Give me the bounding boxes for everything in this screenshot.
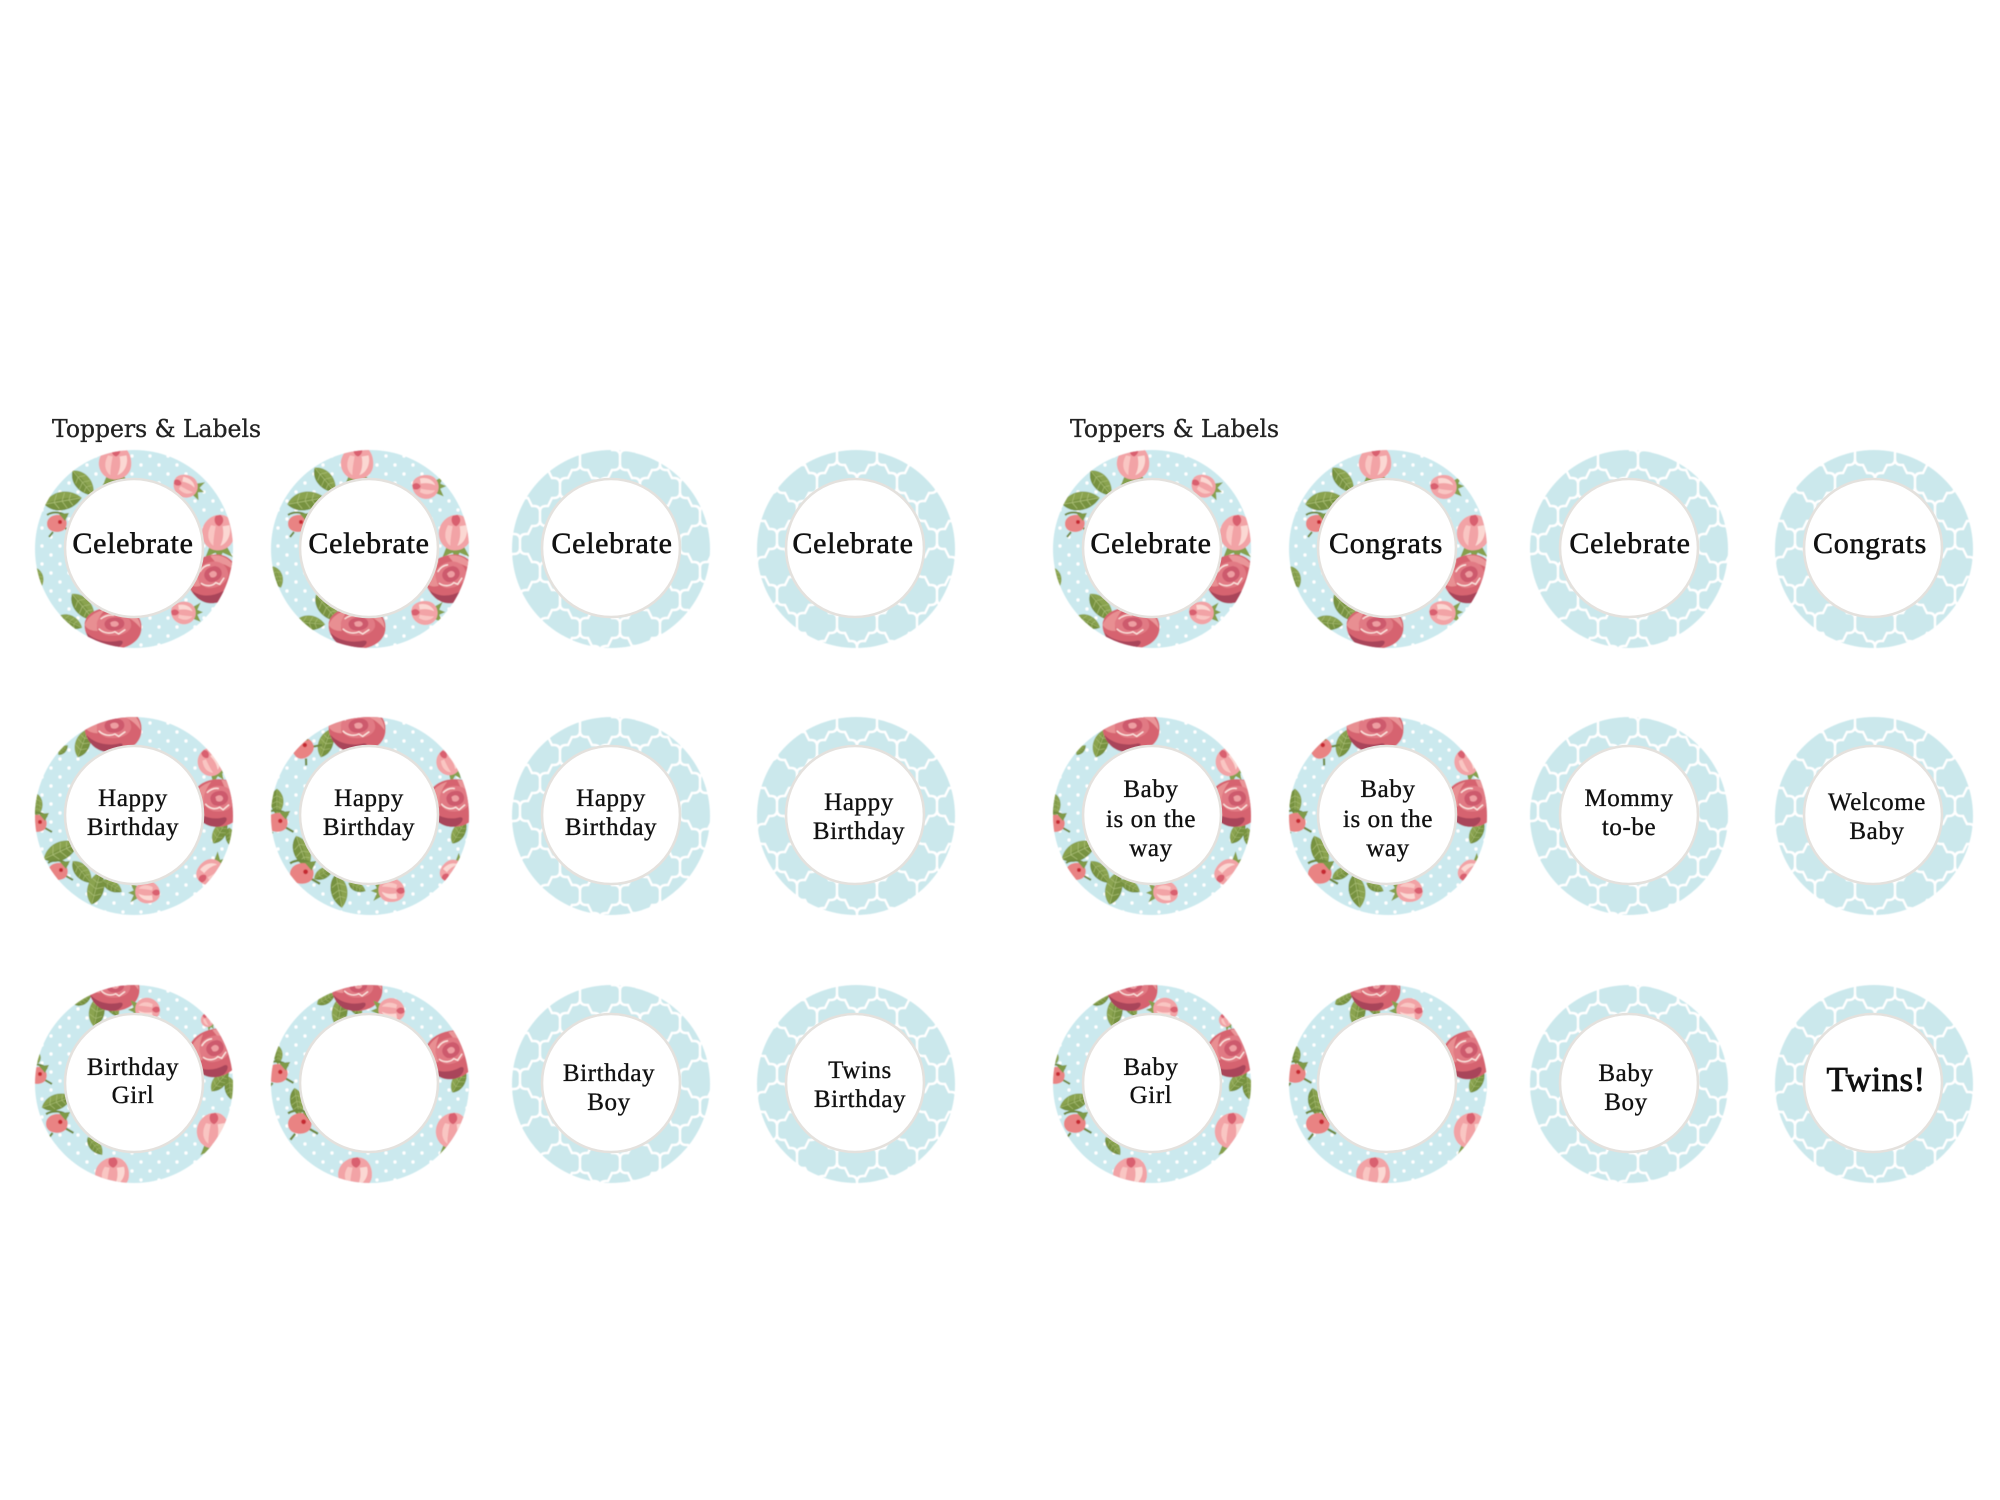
topper: floral Baby is on the way 2: is on the: [1343, 806, 1433, 833]
topper: floral Baby is on the way 2: way: [1366, 835, 1410, 862]
topper: floral Congrats 1: Congrats: [1329, 527, 1443, 560]
topper: trellis Twins Birthday: Birthday: [814, 1086, 906, 1113]
topper: trellis Twins Birthday: [757, 985, 955, 1183]
topper: floral Happy Birthday 2: Birthday: [323, 814, 415, 841]
topper: trellis Birthday Boy: Boy: [587, 1089, 631, 1116]
topper: floral Congrats 1: [1286, 446, 1500, 649]
topper: trellis Mommy to-be: to-be: [1602, 814, 1656, 841]
topper: floral Happy Birthday 1: Happy: [98, 785, 168, 812]
topper: floral Baby is on the way 1: [1045, 708, 1262, 915]
topper: trellis Mommy to-be: Mommy: [1584, 785, 1674, 812]
topper: floral Baby is on the way 1: way: [1129, 835, 1173, 862]
topper: trellis Happy Birthday 1: Birthday: [565, 814, 657, 841]
topper: floral Celebrate 2: [268, 446, 482, 649]
topper: floral Celebrate 1: [30, 446, 244, 649]
topper: trellis Celebrate 2: [757, 450, 955, 648]
topper: trellis Mommy to-be: [1530, 717, 1728, 915]
topper: floral Baby is on the way 2: Baby: [1360, 776, 1416, 803]
topper: trellis Baby Boy: Boy: [1604, 1089, 1648, 1116]
topper: trellis Happy Birthday 2: [757, 717, 955, 915]
topper: trellis Celebrate 1: [512, 450, 710, 648]
topper: trellis Celebrate 3: Celebrate: [1569, 527, 1691, 560]
left sheet heading: Toppers & Labels: [52, 415, 261, 443]
sheet of toppers and labels: [34, 418, 1974, 1184]
topper: trellis Birthday Boy: Birthday: [563, 1060, 655, 1087]
topper: trellis Congrats 2: [1775, 450, 1973, 648]
topper: floral Celebrate 2: Celebrate: [308, 527, 430, 560]
topper: trellis Birthday Boy: [512, 985, 710, 1183]
topper: floral Baby is on the way 1: is on the: [1106, 806, 1196, 833]
topper: floral Happy Birthday 2: [266, 708, 480, 915]
topper: floral blank 2: [1284, 969, 1500, 1199]
topper: trellis Baby Boy: Baby: [1598, 1060, 1654, 1087]
topper: floral Baby Girl: Baby: [1123, 1054, 1179, 1081]
right sheet heading: Toppers & Labels: [1070, 415, 1279, 443]
topper: floral Birthday Girl: Girl: [112, 1082, 154, 1109]
topper: trellis Celebrate 2: Celebrate: [792, 527, 914, 560]
topper: trellis Welcome Baby: Baby: [1849, 818, 1905, 845]
topper: trellis Baby Boy: [1530, 985, 1728, 1183]
topper: floral Celebrate 3: [1048, 446, 1262, 649]
topper: trellis Happy Birthday 2: Birthday: [813, 818, 905, 845]
topper: trellis Happy Birthday 1: [512, 717, 710, 915]
topper: floral Happy Birthday 1: [27, 708, 244, 915]
topper: trellis Welcome Baby: [1775, 717, 1973, 915]
topper: trellis Congrats 2: Congrats: [1813, 527, 1927, 560]
topper: floral Baby Girl: Girl: [1130, 1082, 1172, 1109]
topper: floral Celebrate 1: Celebrate: [72, 527, 194, 560]
topper: floral Happy Birthday 2: Happy: [334, 785, 404, 812]
topper: floral Happy Birthday 1: Birthday: [87, 814, 179, 841]
topper: trellis Celebrate 3: [1530, 450, 1728, 648]
topper: trellis Happy Birthday 1: Happy: [576, 785, 646, 812]
topper: trellis Twins Birthday: Twins: [828, 1057, 892, 1084]
topper: trellis Happy Birthday 2: Happy: [824, 789, 894, 816]
topper: trellis Celebrate 1: Celebrate: [551, 527, 673, 560]
topper: floral Celebrate 3: Celebrate: [1090, 527, 1212, 560]
topper: floral Birthday Girl: Birthday: [87, 1054, 179, 1081]
topper: floral Birthday Girl: [27, 969, 246, 1199]
topper: trellis Twins!: [1775, 985, 1973, 1183]
topper: trellis Twins!: Twins!: [1826, 1060, 1926, 1099]
topper: trellis Welcome Baby: Welcome: [1828, 789, 1926, 816]
topper: floral blank 1: [266, 969, 482, 1199]
topper: floral Baby is on the way 2: [1284, 708, 1498, 915]
topper: floral Baby is on the way 1: Baby: [1123, 776, 1179, 803]
topper: floral Baby Girl: [1045, 969, 1264, 1199]
